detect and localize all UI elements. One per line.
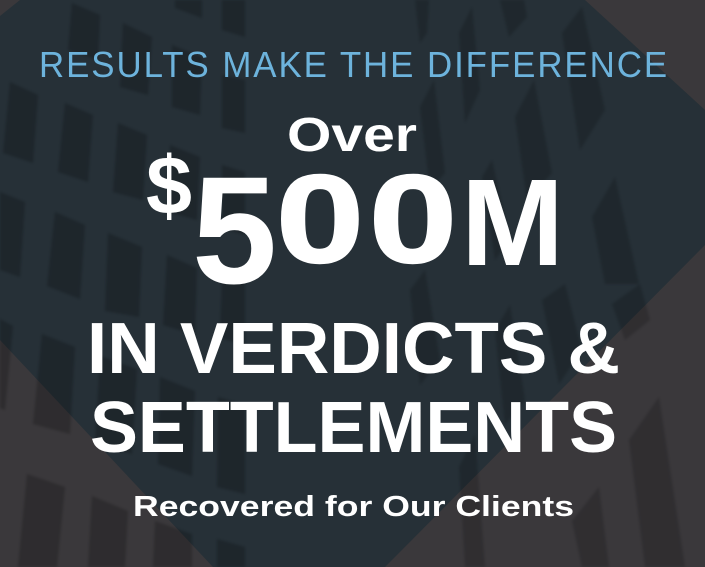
figure: 500M xyxy=(192,145,564,316)
text: recovered for our clients: Recovered for Our Clients xyxy=(133,491,574,523)
figure: 500M: 5 xyxy=(192,145,277,316)
text: settlements: SETTLEMENTS xyxy=(90,388,617,468)
building windows: right facade slits xyxy=(410,0,685,567)
figure: 500M: 0 xyxy=(276,150,364,289)
building windows: left facade grid xyxy=(0,0,245,567)
heading: results make the difference: RESULTS MAKE THE DIFFERENCE xyxy=(39,44,669,85)
text: dollar sign: $ xyxy=(146,139,192,232)
text: over: Over xyxy=(287,109,417,162)
figure: 500M: M xyxy=(461,155,564,292)
text: in verdicts and: IN VERDICTS & xyxy=(87,309,620,389)
figure: 500M: 0 xyxy=(369,150,457,289)
